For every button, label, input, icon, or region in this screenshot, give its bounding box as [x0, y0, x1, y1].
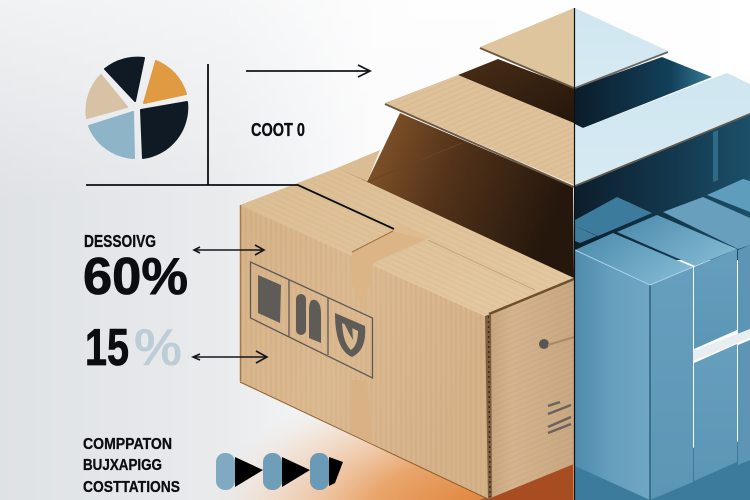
arrow: double headed upper — [194, 245, 264, 255]
label: DESSOIVG: DESSOIVG — [84, 231, 156, 251]
arrow: top right — [246, 65, 370, 77]
blue interior wall — [575, 113, 750, 260]
pie slice: orange — [144, 61, 186, 103]
pie slice: navy large — [141, 102, 187, 158]
pie slice: light blue — [89, 112, 134, 158]
text block: bottom labels: COMPPATON — [83, 436, 172, 453]
divider between cardboard and blue — [574, 8, 576, 500]
box side face — [485, 278, 574, 499]
text block: bottom labels — [83, 436, 180, 496]
packing tape — [352, 224, 430, 444]
pie slice: beige — [86, 75, 127, 118]
middle block column — [617, 215, 750, 481]
top cardboard flap — [480, 8, 574, 88]
icon: two pills — [296, 294, 321, 343]
pie chart — [86, 58, 187, 158]
axis lines — [86, 64, 394, 229]
white strap — [693, 329, 750, 361]
icon row: pills and triangles — [216, 453, 343, 490]
shadow under blue top flap — [575, 57, 712, 128]
lower cardboard flap — [385, 75, 574, 187]
panel: blue cutaway with stacked blocks — [575, 8, 750, 500]
text block: bottom labels: BUJXAPIGG — [83, 457, 162, 474]
right block column — [738, 245, 750, 465]
icon: square — [258, 275, 281, 323]
shadow under top flap — [458, 59, 574, 124]
upper blue flap — [575, 8, 668, 88]
box interior — [367, 113, 574, 280]
lower blue flap — [575, 73, 750, 186]
text block: bottom labels: COSTTATIONS — [83, 479, 180, 496]
stat: 15 with percent — [85, 319, 182, 377]
stat: 15 with percent: % — [134, 319, 182, 377]
panel: open cardboard box — [240, 8, 574, 499]
stat: 15 with percent: 15 — [85, 319, 129, 377]
arrow: double headed lower — [193, 351, 267, 363]
rear block tops — [575, 179, 750, 249]
box top face — [240, 168, 574, 316]
box side mark — [539, 337, 574, 433]
box front face — [240, 205, 488, 499]
handling label — [250, 262, 372, 378]
front block — [575, 233, 693, 500]
icon: shield — [335, 313, 365, 357]
stat: 60%: 60% — [83, 248, 188, 306]
heading: COOT 0: COOT 0 — [251, 120, 305, 140]
pie slice: navy top — [105, 58, 144, 101]
small rear flap — [337, 150, 380, 182]
